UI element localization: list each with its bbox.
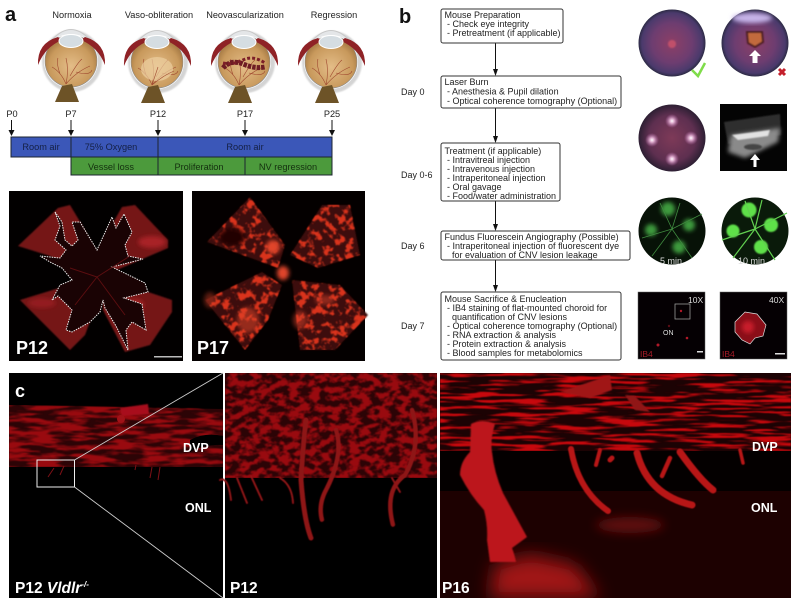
postnatal day labels: P12 bbox=[150, 109, 166, 119]
label P17: P17 bbox=[197, 338, 229, 358]
step box: treatment: - Intraperitoneal injection bbox=[447, 173, 546, 183]
sprouting vessels bbox=[220, 410, 416, 538]
image: IB4 choroid flat mount at 10X: ON bbox=[663, 330, 674, 337]
label P12 Vldlr: P12 Vldlr bbox=[15, 580, 81, 597]
postnatal day labels: P7 bbox=[65, 109, 77, 119]
image: P12 Vldlr low magnification bbox=[9, 373, 223, 598]
label DVP: DVP bbox=[183, 441, 209, 455]
step box: treatment: - Intravitreal injection bbox=[447, 155, 530, 165]
step box: laser burn: - Anesthesia & Pupil dilation bbox=[447, 86, 559, 96]
step box: laser burn bbox=[441, 76, 621, 108]
label DVP: DVP bbox=[752, 440, 778, 454]
postnatal day labels: P25 bbox=[324, 109, 340, 119]
image: IB4 CNV lesion at 40X bbox=[720, 292, 787, 359]
image: fluorescein angiography at 10 minutes bbox=[722, 198, 788, 266]
timeline bar labels: Proliferation bbox=[174, 162, 224, 172]
image: P17 retinal flat mount bbox=[192, 191, 368, 361]
image: fluorescein angiography at 5 minutes bbox=[638, 198, 706, 266]
timeline bar labels: Room air bbox=[226, 142, 264, 152]
step box: fundus fluorescein angiography: Fundus Fluorescein Angiography (Possible) bbox=[444, 232, 619, 242]
day labels: Day 0 bbox=[401, 87, 425, 97]
step box: mouse preparation bbox=[441, 9, 563, 43]
icon: red cross bbox=[779, 69, 785, 75]
time label: 10 min bbox=[738, 256, 765, 266]
image: IB4 CNV lesion at 40X: IB4 bbox=[722, 349, 735, 359]
step box: sacrifice and enucleation bbox=[441, 292, 621, 360]
stage labels: Vaso-obliteration bbox=[125, 10, 193, 20]
step box: sacrifice and enucleation: quantification of CNV lesions bbox=[452, 312, 568, 322]
time label: 5 min bbox=[660, 256, 682, 266]
zoom lines bbox=[74, 373, 223, 598]
stage labels: Normoxia bbox=[52, 10, 93, 20]
postnatal day labels: P17 bbox=[237, 109, 253, 119]
timeline arrows bbox=[8, 120, 335, 136]
fluorescent tufts bbox=[205, 197, 368, 350]
icon: green check bbox=[692, 63, 705, 76]
image: damaged fundus with red cross bbox=[722, 10, 788, 76]
image: P16 section bbox=[440, 373, 791, 598]
zoom box bbox=[37, 460, 74, 487]
timeline bar labels: 75% Oxygen bbox=[85, 142, 137, 152]
step box: treatment: Treatment (if applicable) bbox=[444, 146, 541, 156]
label P12: P12 bbox=[230, 580, 258, 597]
step box: mouse preparation: - Pretreatment (if applicable) bbox=[447, 28, 561, 38]
label P16: P16 bbox=[442, 580, 470, 597]
timeline bar labels bbox=[22, 142, 317, 172]
timeline bars bbox=[11, 137, 332, 175]
dashed vessel boundary bbox=[40, 212, 148, 350]
day labels bbox=[401, 87, 433, 331]
image: IB4 CNV lesion at 40X: 40X bbox=[769, 295, 784, 305]
step box: fundus fluorescein angiography: for evaluation of CNV lesion leakage bbox=[452, 250, 598, 260]
timeline bar labels: Vessel loss bbox=[88, 162, 134, 172]
step box: treatment: - Intravenous injection bbox=[447, 164, 535, 174]
icon: normoxia eye bbox=[38, 30, 105, 102]
label ONL: ONL bbox=[751, 501, 778, 515]
timeline bar labels: Room air bbox=[22, 142, 60, 152]
image: IB4 choroid flat mount at 10X bbox=[638, 292, 705, 359]
image: P12 retinal flat mount bbox=[9, 191, 183, 361]
panel a: oxygen-induced retinopathy timeline bbox=[5, 4, 368, 361]
step box: fundus fluorescein angiography: - Intraperitoneal injection of fluorescent dye bbox=[447, 241, 619, 251]
postnatal day labels: P0 bbox=[6, 109, 18, 119]
image: fundus after laser burns bbox=[638, 104, 706, 172]
step box: sacrifice and enucleation: - IB4 staining of flat-mounted choroid for bbox=[447, 303, 607, 313]
step box: treatment bbox=[441, 143, 560, 201]
step box: sacrifice and enucleation: - Blood samples for metabolomics bbox=[447, 348, 583, 358]
day labels: Day 7 bbox=[401, 321, 425, 331]
step box: treatment: - Food/water administration bbox=[447, 191, 556, 201]
panel c: retinal cross sections bbox=[9, 373, 791, 598]
image: optical coherence tomography volume bbox=[720, 104, 787, 171]
day labels: Day 0-6 bbox=[401, 170, 433, 180]
step box: fundus fluorescein angiography bbox=[441, 231, 630, 260]
step box: sacrifice and enucleation: - Optical coherence tomography (Optional) bbox=[447, 321, 617, 331]
stage labels: Neovascularization bbox=[206, 10, 284, 20]
icon: regression eye bbox=[298, 30, 365, 103]
diffuse glow bbox=[490, 555, 600, 598]
timeline bar labels: NV regression bbox=[259, 162, 317, 172]
step box: mouse preparation: - Check eye integrity bbox=[447, 19, 530, 29]
stage labels bbox=[52, 10, 357, 20]
vessel sprouts bbox=[571, 449, 743, 511]
icon: vaso-obliteration eye bbox=[124, 30, 191, 103]
image: IB4 choroid flat mount at 10X: IB4 bbox=[640, 349, 653, 359]
arrow bbox=[750, 154, 760, 167]
panel letter b: b bbox=[399, 6, 411, 28]
scale bar bbox=[154, 356, 182, 358]
step box: laser burn: - Optical coherence tomography (Optional) bbox=[447, 96, 617, 106]
label ONL: ONL bbox=[185, 501, 212, 515]
step box: laser burn: Laser Burn bbox=[444, 77, 489, 87]
label c: c bbox=[15, 381, 25, 401]
step box: mouse preparation: Mouse Preparation bbox=[444, 10, 521, 20]
stage labels: Regression bbox=[311, 10, 357, 20]
postnatal day labels bbox=[6, 109, 340, 119]
step box: sacrifice and enucleation: - RNA extraction & analysis bbox=[447, 330, 557, 340]
inset box bbox=[675, 304, 690, 319]
panel b: laser CNV workflow bbox=[399, 6, 788, 360]
label P12 Vldlr: -/- bbox=[81, 580, 89, 589]
image: P12 enlarged inset bbox=[220, 373, 437, 598]
step box: sacrifice and enucleation: - Protein extraction & analysis bbox=[447, 339, 567, 349]
image: healthy fundus with check mark bbox=[638, 10, 706, 76]
flow arrows bbox=[493, 43, 498, 292]
large vessel bbox=[460, 421, 527, 562]
arrow bbox=[749, 50, 761, 63]
panel letter a: a bbox=[5, 4, 17, 26]
step box: sacrifice and enucleation: Mouse Sacrifice & Enucleation bbox=[444, 294, 567, 304]
step box: treatment: - Oral gavage bbox=[447, 182, 502, 192]
label P12: P12 bbox=[16, 338, 48, 358]
icon: neovascularization eye with tufts bbox=[211, 30, 278, 103]
day labels: Day 6 bbox=[401, 241, 425, 251]
image: IB4 choroid flat mount at 10X: 10X bbox=[688, 295, 703, 305]
